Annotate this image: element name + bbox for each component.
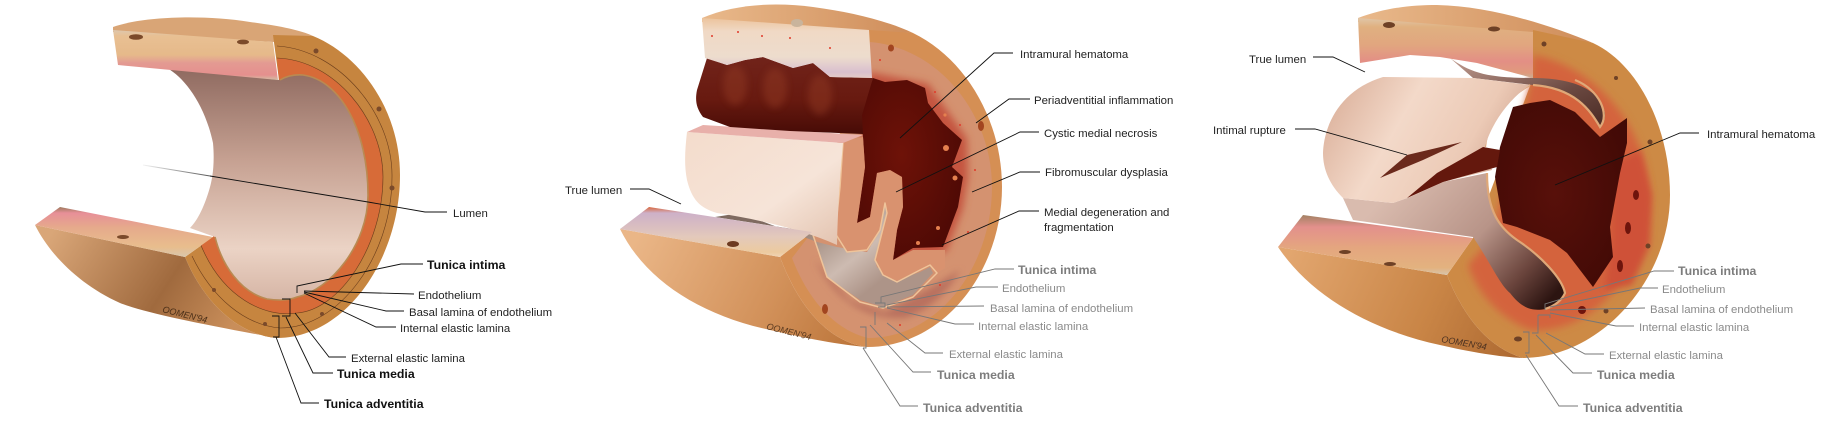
cut face bottom: [1278, 215, 1473, 275]
label: Basal lamina of endothelium: Basal lamina of endothelium: [1650, 304, 1793, 316]
label: Intramural hematoma (centre): Intramural hematoma: [1020, 49, 1129, 61]
label: True lumen (right): [1249, 54, 1365, 72]
label: Intramural hematoma (centre): [900, 49, 1129, 138]
label: Tunica media: [1532, 315, 1675, 382]
label: Endothelium: Endothelium: [1662, 284, 1725, 296]
flap top cut: [687, 125, 863, 143]
grey wall layer labels (centre): [860, 263, 1133, 415]
flap white surface: [685, 132, 843, 245]
inflamed halo around hematoma: [860, 78, 963, 270]
label: True lumen (right): True lumen: [1249, 54, 1306, 66]
label: Tunica intima: [1545, 264, 1757, 310]
adventitia wall ring: [185, 35, 400, 338]
cut face bottom: [620, 207, 812, 257]
label: True lumen (centre): [565, 185, 681, 204]
label: External elastic lamina: [887, 323, 1064, 361]
vessel wall tissue: [792, 42, 992, 338]
grey wall layer labels (right): [1523, 264, 1793, 415]
label: Tunica media: Tunica media: [337, 367, 415, 381]
label: Intramural hematoma (right): [1555, 129, 1816, 185]
lumen inner surface: [167, 68, 368, 300]
outer top surface: [702, 5, 913, 33]
dark hematoma cavity: [857, 78, 963, 260]
bulging hematoma lobe: [696, 57, 873, 134]
red inflamed zone: [1468, 55, 1648, 330]
intimal rupture: lower tear: [1407, 147, 1500, 198]
label: Periadventitial inflammation: Periadventitial inflammation: [1034, 95, 1173, 107]
lobe highlights: [723, 65, 832, 115]
label: Cystic medial necrosis: [896, 128, 1158, 192]
panel: intimal rupture with large hematoma: [1278, 5, 1670, 358]
cut face top: [113, 30, 278, 80]
lower true lumen: [1343, 173, 1565, 310]
intimal rupture: upper tear: [1380, 142, 1462, 178]
label: Tunica adventitia: Tunica adventitia: [324, 397, 424, 411]
label: Endothelium: Endothelium: [1002, 283, 1065, 295]
outer surface of lower segment: [1278, 247, 1523, 358]
label: External elastic lamina: [1546, 333, 1724, 362]
label: Tunica media: Tunica media: [937, 368, 1015, 382]
label: Basal lamina of endothelium: Basal lamina of endothelium: [990, 303, 1133, 315]
cut face top: [702, 18, 872, 78]
label: Internal elastic lamina: [887, 308, 1089, 333]
label: Tunica media: Tunica media: [1597, 368, 1675, 382]
vessel wall outer rim: [780, 30, 1002, 347]
label: Endothelium: Endothelium: [418, 290, 481, 302]
label: Internal elastic lamina: Internal elastic lamina: [978, 321, 1089, 333]
outer surface of lower segment: [35, 225, 277, 338]
label: Internal elastic lamina: Internal elastic lamina: [1639, 322, 1750, 334]
label: Tunica intima: [881, 263, 1097, 303]
vessels and inflamed spots: [1339, 22, 1652, 342]
label: Fibromuscular dysplasia: [972, 167, 1168, 192]
vessels and blood spots: [727, 19, 984, 314]
label: True lumen (centre): True lumen: [565, 185, 622, 197]
label: Basal lamina of endothelium: [304, 292, 552, 319]
adventitia layer lines: [192, 46, 392, 328]
hematoma wall rim: [1485, 80, 1604, 309]
label: Internal elastic lamina: Internal elastic lamina: [400, 323, 511, 335]
fold tissue: [835, 137, 945, 281]
label: External elastic lamina: External elastic lamina: [949, 349, 1064, 361]
label: Medial degeneration and fragmentation: Medial degeneration and: [1044, 207, 1169, 219]
label: Endothelium: [887, 283, 1065, 305]
dark hematoma cavity: [1495, 100, 1627, 287]
label: Tunica intima: [297, 258, 506, 293]
label: Intimal rupture: Intimal rupture: [1213, 125, 1286, 137]
label: Intramural hematoma (right): Intramural hematoma: [1707, 129, 1816, 141]
label: Internal elastic lamina: [1550, 313, 1750, 334]
fold rim: [812, 143, 937, 308]
outer top surface: [1358, 5, 1593, 43]
label: Tunica adventitia: [860, 327, 1023, 415]
tunica media band: [200, 58, 383, 314]
vessels in wall: [117, 34, 394, 326]
signature: OOMEN'94: [1441, 334, 1487, 352]
outer top surface: [113, 17, 313, 42]
label: Tunica media: [282, 299, 415, 381]
label: Tunica media: [870, 303, 1015, 382]
signature: OOMEN'94: [766, 321, 812, 342]
panel: normal aortic wall: [35, 17, 400, 338]
mottled adventitial patch: [1605, 150, 1652, 290]
label: Tunica adventitia: Tunica adventitia: [923, 401, 1023, 415]
label: Basal lamina of endothelium: Basal lamina of endothelium: [409, 307, 552, 319]
label: Endothelium: [304, 290, 481, 302]
label: Lumen: [143, 165, 488, 220]
label: Internal elastic lamina: [304, 293, 511, 335]
label: Endothelium: [1550, 284, 1725, 307]
label: Tunica intima: Tunica intima: [427, 258, 506, 272]
label: Tunica intima: Tunica intima: [1678, 264, 1757, 278]
panel: intramural hematoma with intimal fold: [620, 5, 1002, 347]
label: Lumen: Lumen: [453, 208, 488, 220]
label: Tunica adventitia: [272, 316, 424, 411]
label: External elastic lamina: External elastic lamina: [1609, 350, 1724, 362]
label: Periadventitial inflammation: [976, 95, 1173, 123]
lower true lumen: [715, 203, 933, 307]
lower wall tint: [815, 260, 960, 318]
pale flap surface: [1323, 77, 1530, 203]
label: Intimal rupture: [1213, 125, 1407, 155]
cut face bottom: [35, 207, 213, 257]
label: Tunica adventitia: Tunica adventitia: [1583, 401, 1683, 415]
label: Medial degeneration and fragmentation: [942, 207, 1169, 245]
label: External elastic lamina: [295, 313, 466, 365]
vessel wall ring: [1447, 30, 1670, 358]
label: Tunica adventitia: [1523, 332, 1683, 415]
cut face top: [1358, 18, 1533, 78]
outer surface of lower segment: [620, 229, 867, 347]
label: Fibromuscular dysplasia: Fibromuscular dysplasia: [1045, 167, 1168, 179]
upper lumen shadow: [1450, 58, 1605, 127]
label: Tunica intima: Tunica intima: [1018, 263, 1097, 277]
label: External elastic lamina: External elastic lamina: [351, 353, 466, 365]
intima rim: [215, 75, 368, 300]
signature: OOMEN'94: [162, 304, 208, 325]
label: Cystic medial necrosis: Cystic medial necrosis: [1044, 128, 1158, 140]
label: Medial degeneration and fragmentation: fragmentation: [1044, 222, 1114, 234]
